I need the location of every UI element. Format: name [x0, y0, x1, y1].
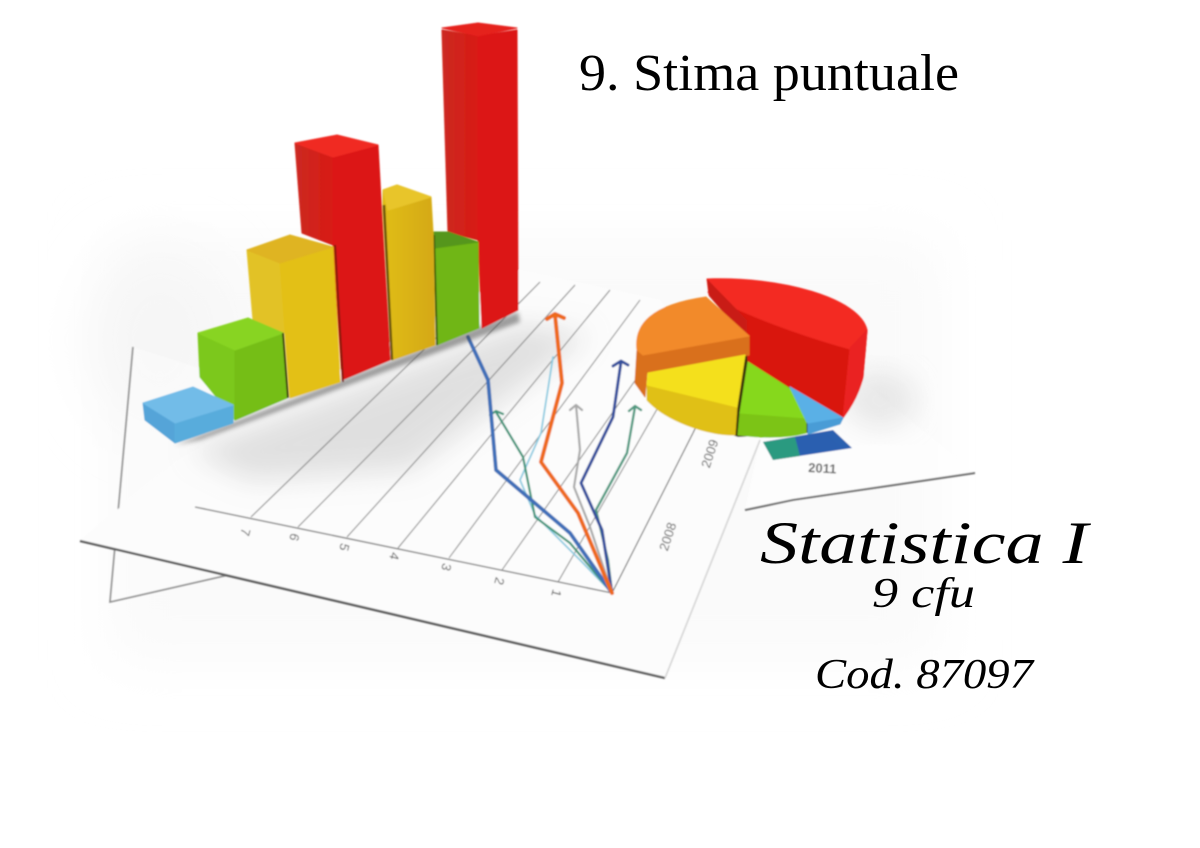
- small blue bar: [143, 387, 233, 443]
- axis tick labels: [237, 438, 721, 599]
- 3D pie chart: [635, 279, 916, 437]
- axis tick labels: 6: [286, 532, 303, 543]
- line chart grid and axes: [195, 282, 703, 593]
- orange pie slice: [635, 297, 749, 397]
- yellow pie slice: [647, 355, 745, 435]
- axis tick labels: 5: [336, 542, 353, 553]
- year label 2011: 2011: [808, 460, 837, 476]
- large green bar: [198, 318, 288, 420]
- small green bar: [433, 232, 479, 345]
- title: 9. Stima puntuale: [579, 45, 959, 102]
- axis tick labels: 2008: [656, 521, 679, 553]
- red pie slice: [707, 279, 867, 418]
- 3D bar chart: [143, 23, 520, 445]
- credits: 9 cfu: [872, 571, 975, 617]
- mini bars on right sheet: [763, 430, 852, 460]
- large yellow bar: [247, 235, 343, 398]
- trend line: grey with arrow: [570, 405, 612, 593]
- rear yellow bar: [383, 185, 435, 360]
- trend line: pale blue: [520, 357, 612, 593]
- front paper sheet: [80, 270, 760, 678]
- trend line: green: [596, 406, 641, 593]
- tall red bar: [442, 23, 518, 328]
- back right paper sheet: [745, 380, 975, 510]
- axis tick labels: 2: [491, 576, 508, 587]
- axis tick labels: 7: [237, 527, 254, 538]
- back left paper sheet: [110, 347, 300, 602]
- green pie slice: [738, 362, 806, 437]
- trend line: orange: [541, 314, 612, 593]
- axis tick labels: 3: [438, 562, 455, 573]
- course code: Cod. 87097: [815, 652, 1035, 698]
- axis tick labels: 4: [386, 551, 403, 562]
- trend line: navy: [581, 361, 628, 593]
- blue pie slice: [790, 387, 843, 434]
- course name: Statistica I: [760, 510, 1092, 576]
- trend line: blue: [468, 337, 612, 593]
- middle red bar: [295, 135, 390, 380]
- illustration: charts on paper sheets: [80, 23, 975, 678]
- colored trend lines: [468, 314, 641, 593]
- trend line: teal: [490, 411, 612, 593]
- axis tick labels: 1: [548, 588, 565, 599]
- pie dark underlay: [640, 340, 843, 437]
- axis tick labels: 2009: [698, 438, 721, 470]
- soft background haze: [90, 240, 940, 660]
